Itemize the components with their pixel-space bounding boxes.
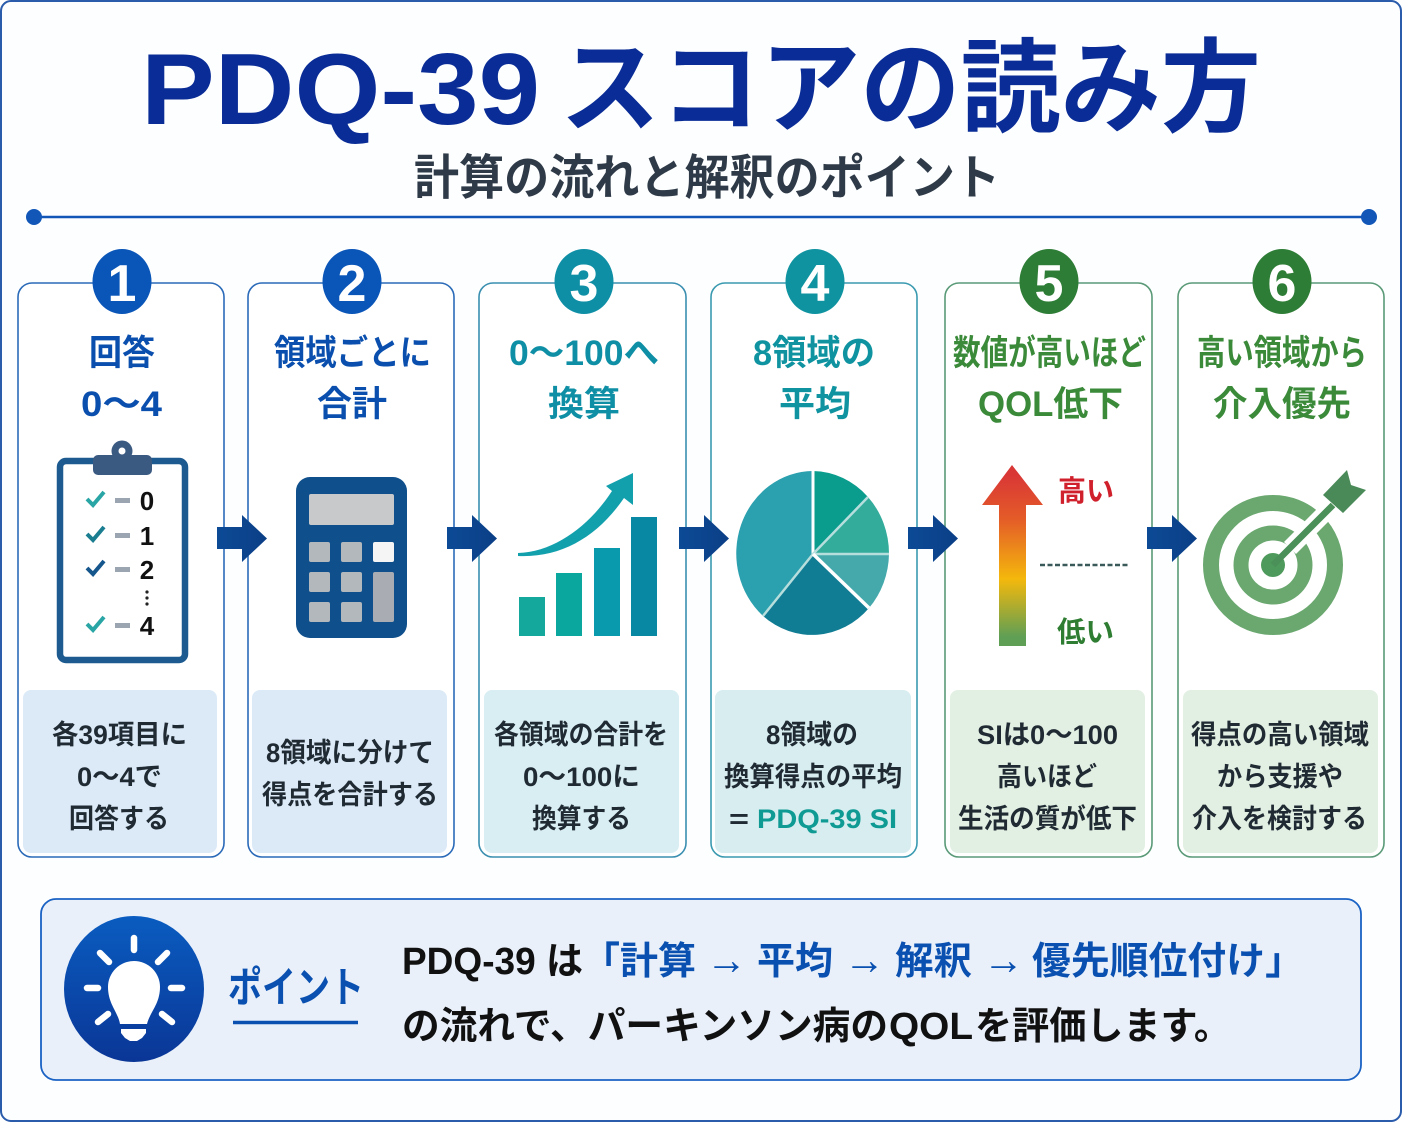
step 2 description: [252, 690, 447, 853]
step 6 heading: 高い領域から: [1197, 334, 1367, 373]
arrow: step 5 to 6: [1147, 515, 1197, 562]
point message: QOL: [889, 1006, 973, 1048]
icon: clipboard checklist: [60, 440, 185, 660]
step 2 heading: [274, 334, 431, 424]
point message: →: [706, 936, 747, 983]
step 6 badge: 6: [1268, 255, 1296, 313]
step 2 badge: 2: [338, 255, 366, 313]
step 2 heading: 領域ごとに: [274, 334, 431, 373]
step 3 heading: [509, 334, 659, 424]
step 1 heading: 回答: [89, 334, 155, 373]
step 4 description: =: [729, 804, 749, 834]
panel: key point: [41, 899, 1361, 1080]
arrow: step 4 to 5: [908, 515, 958, 562]
icon: light bulb: [64, 916, 204, 1062]
point message: →: [983, 936, 1024, 983]
step 3 badge: 3: [570, 255, 598, 313]
step 1 heading: [81, 334, 163, 424]
panel: step 4 average: [711, 249, 917, 857]
point label: [228, 964, 364, 1022]
step 6 description: 得点の高い領域: [1191, 720, 1369, 750]
icon: clipboard checklist: 0: [140, 486, 154, 516]
step 5 heading: 数値が高いほど: [953, 334, 1146, 373]
point message: 解釈: [895, 941, 972, 983]
step 4 badge: 4: [801, 255, 830, 313]
step 5 badge: 5: [1035, 255, 1063, 313]
step 4 heading: 平均: [779, 385, 851, 424]
step 6 description: 介入を検討する: [1192, 804, 1367, 834]
step 4 heading: [753, 334, 875, 424]
icon: clipboard checklist: 4: [140, 611, 155, 641]
icon: clipboard checklist: 2: [140, 555, 154, 585]
step 2 description: 8領域に分けて: [266, 738, 434, 768]
step 1 description: 0〜4で: [77, 762, 162, 792]
step 5 heading: [953, 334, 1146, 424]
icon: high low gradient arrow: [982, 465, 1130, 649]
subtitle: 計算の流れと解釈のポイント: [414, 152, 1000, 205]
step 5 description: 生活の質が低下: [958, 803, 1137, 834]
arrow: step 2 to 3: [447, 515, 497, 562]
step 3 badge: [554, 249, 614, 314]
step 5 description: SIは0〜100: [977, 720, 1118, 750]
step 2 heading: 合計: [317, 385, 387, 424]
step 3 description: 換算する: [532, 804, 631, 834]
arrow: step 1 to 2: [217, 515, 267, 562]
point message: →: [844, 936, 885, 983]
icon: calculator: [296, 477, 407, 638]
step 6 heading: 介入優先: [1213, 385, 1351, 424]
icon: high low gradient arrow: 高い: [1058, 475, 1114, 508]
step 6 heading: [1197, 334, 1367, 424]
step 3 description: 0〜100に: [523, 762, 640, 792]
step 5 description: [950, 690, 1145, 853]
step 2 description: 得点を合計する: [262, 780, 438, 810]
point message: 優先順位付け」: [1032, 941, 1304, 983]
step 2 badge: [322, 249, 382, 314]
point message: PDQ-39 は: [402, 941, 583, 983]
step 5 description: 高いほど: [997, 762, 1097, 792]
title: [141, 32, 1261, 146]
panel: step 2 sum: [248, 249, 454, 857]
title divider: [26, 209, 1377, 225]
step 1 badge: [92, 249, 152, 314]
step 1 description: [23, 690, 217, 853]
panel: step 1 answer: [18, 249, 224, 857]
panel: step 5 interpret: [945, 249, 1152, 857]
step 1 heading: 0〜4: [81, 385, 163, 424]
step 4 badge: [786, 249, 844, 314]
step 5 heading: QOL低下: [978, 385, 1123, 424]
step 3 description: [484, 690, 679, 853]
point message: 「計算: [582, 941, 696, 983]
panel: step 3 convert: [479, 249, 686, 857]
point message: の流れで、パーキンソン病の: [402, 1006, 888, 1048]
step 1 description: 回答する: [69, 803, 169, 834]
icon: clipboard checklist: 1: [140, 521, 154, 551]
point message: 平均: [757, 941, 833, 983]
arrow: step 3 to 4: [679, 515, 729, 562]
step 4 heading: 8領域の: [753, 334, 875, 373]
icon: target with dart: [1211, 470, 1366, 627]
icon: pie chart: [736, 471, 889, 635]
step 6 badge: [1252, 249, 1312, 314]
step 4 description: [715, 690, 911, 853]
panel: step 6 prioritize: [1178, 249, 1384, 857]
point message: を評価します。: [975, 1006, 1231, 1048]
step 3 heading: 換算: [548, 385, 620, 424]
step 4 description: 換算得点の平均: [724, 762, 902, 792]
title: PDQ-39: [141, 34, 540, 146]
point label: ポイント: [228, 964, 364, 1011]
step 5 badge: [1020, 249, 1078, 314]
title: スコアの読み方: [560, 32, 1261, 146]
step 1 badge: 1: [108, 255, 136, 313]
step 6 description: [1183, 690, 1378, 853]
step 6 description: から支援や: [1217, 762, 1343, 792]
step 4 description: 8領域の: [766, 720, 858, 750]
step 1 description: 各39項目に: [52, 720, 187, 750]
step 3 description: 各領域の合計を: [494, 720, 668, 750]
step 4 description: PDQ-39 SI: [757, 804, 897, 834]
step 3 heading: 0〜100へ: [509, 334, 659, 373]
icon: rising bar chart: [518, 473, 657, 636]
point message: [402, 936, 1304, 1048]
icon: high low gradient arrow: 低い: [1057, 616, 1114, 649]
